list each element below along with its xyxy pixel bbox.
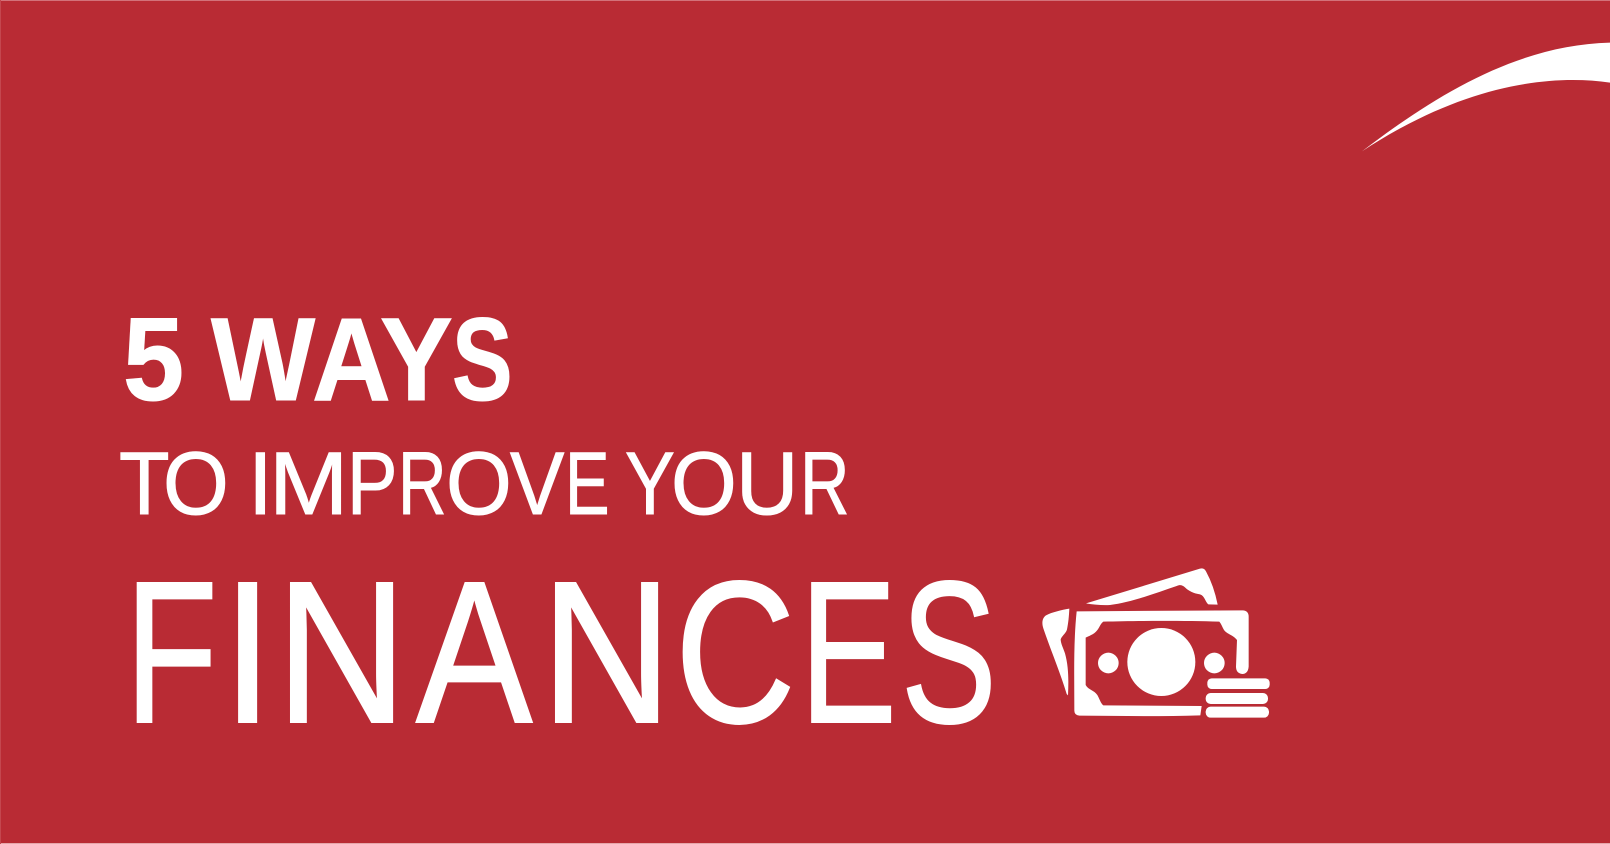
title line: 5 WAYS: W — [211, 294, 315, 426]
title line: 5 WAYS: 5 — [123, 294, 184, 426]
title line: TO IMPROVE YOUR: U — [736, 433, 798, 533]
title line: TO IMPROVE YOUR: R — [398, 433, 446, 533]
note right dot — [1204, 653, 1225, 673]
title line: TO IMPROVE YOUR: O — [446, 433, 511, 533]
title line: 5 WAYS: S — [452, 294, 512, 426]
title line: FINANCES: I — [222, 539, 273, 765]
title line: TO IMPROVE YOUR: O — [163, 433, 229, 533]
title line: TO IMPROVE YOUR: E — [565, 433, 610, 533]
title line: 5 WAYS: Y — [380, 294, 453, 426]
title line: TO IMPROVE YOUR: Y — [625, 433, 675, 533]
icon: banknotes and coins — [1042, 568, 1270, 718]
title line: FINANCES: E — [800, 539, 897, 765]
title line: 5 WAYS: A — [312, 294, 391, 426]
title line: FINANCES: C — [675, 539, 795, 765]
back note, top — [1086, 568, 1218, 605]
title line: TO IMPROVE YOUR — [119, 433, 849, 533]
title line: TO IMPROVE YOUR: V — [510, 433, 565, 533]
title line: FINANCES: S — [901, 539, 997, 765]
title line: TO IMPROVE YOUR: O — [671, 433, 737, 533]
title line: FINANCES: F — [125, 539, 218, 765]
title line: TO IMPROVE YOUR: I — [248, 433, 273, 533]
title line: 5 WAYS — [123, 294, 512, 426]
title line: FINANCES: A — [416, 539, 532, 765]
title line: FINANCES — [125, 539, 997, 765]
title line: TO IMPROVE YOUR: P — [347, 433, 398, 533]
title line: TO IMPROVE YOUR: R — [800, 433, 849, 533]
decorative swoosh — [1362, 43, 1610, 151]
back note, left — [1042, 609, 1069, 695]
title line: FINANCES: N — [541, 539, 672, 765]
title line: TO IMPROVE YOUR: T — [119, 433, 170, 533]
title line: TO IMPROVE YOUR: M — [269, 433, 348, 533]
title line: FINANCES: N — [276, 539, 407, 765]
front note frame — [1074, 610, 1249, 716]
note left dot — [1098, 653, 1119, 673]
note centre medallion — [1127, 628, 1195, 696]
coin stack — [1206, 678, 1270, 718]
